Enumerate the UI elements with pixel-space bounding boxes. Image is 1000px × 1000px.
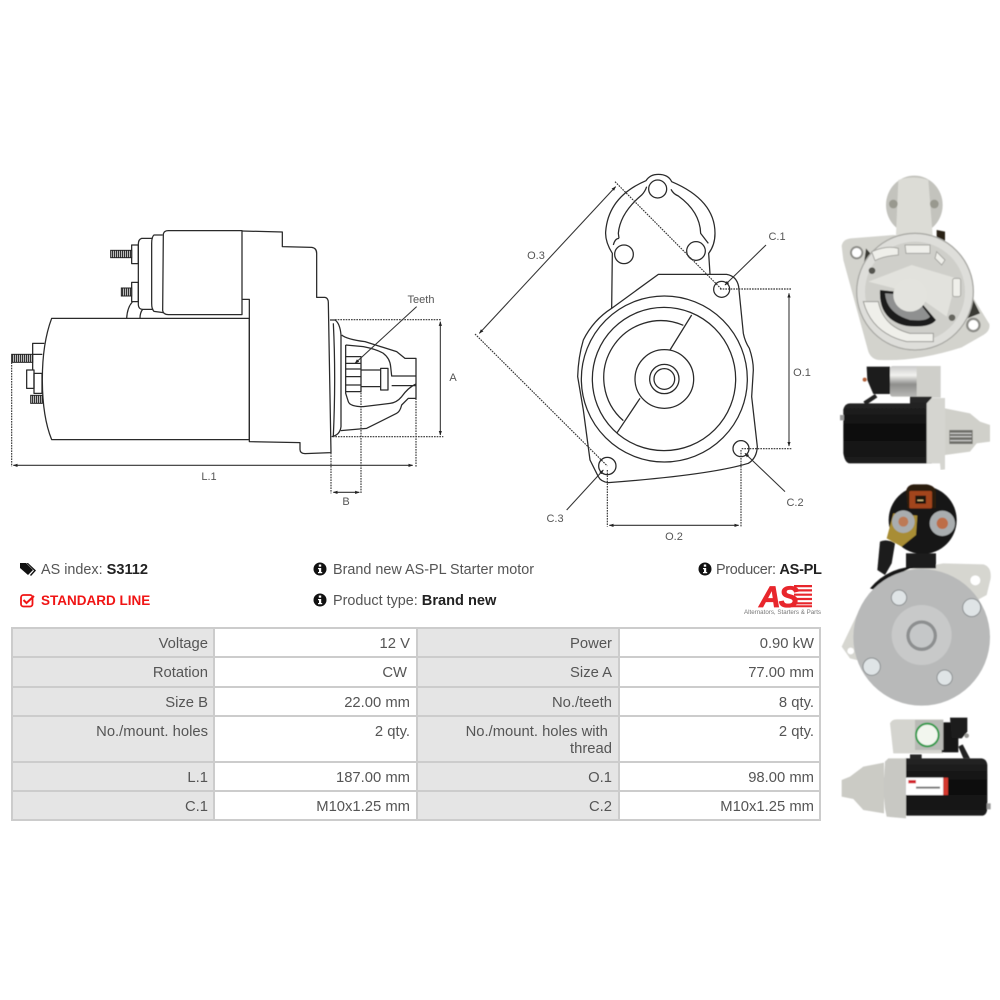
front view technical drawing: C.3 [546,513,564,525]
specification table: Size A [570,665,612,681]
specification table: C.2 [589,799,612,815]
specification table: 98.00 mm [748,770,814,786]
specification table: CW [382,665,407,681]
specification table: 0.90 kW [760,636,814,652]
side view technical drawing: A [449,372,457,384]
specification table: 22.00 mm [344,695,410,711]
specification table: L.1 [187,770,208,786]
front view technical drawing [474,174,811,543]
specification table: Voltage [159,636,208,652]
front view technical drawing: C.1 [768,231,786,243]
icon: check square [20,594,35,608]
side view technical drawing: Teeth [408,294,434,306]
info: brand new starter motor: Brand new AS-PL Starter motor [333,562,534,578]
info: producer: Producer: AS-PL [716,562,822,578]
specification table: O.1 [588,770,612,786]
icon: info [314,562,326,576]
specification table [11,627,821,821]
specification table: M10x1.25 mm [316,799,410,815]
specification table: 187.00 mm [336,770,410,786]
specification table: 2 qty. [779,724,814,740]
logo: AS: Alternators, Starters & Parts [744,609,821,616]
front view technical drawing: O.1 [793,367,811,379]
specification table: No./teeth [552,695,612,711]
photo: starter front end [841,175,990,360]
front view technical drawing: O.2 [665,531,683,543]
side view technical drawing: L.1 [201,471,217,483]
logo: AS [744,584,821,616]
icon: info [698,562,712,576]
specification table: Rotation [153,665,208,681]
side view technical drawing [11,230,457,508]
photo: starter side view right [841,716,992,819]
icon: info [314,594,326,606]
specification table: 2 qty. [375,724,410,740]
side view technical drawing: B [342,496,350,508]
info: product type: Product type: Brand new [333,593,496,609]
info: AS index: AS index: S3112 [41,562,148,578]
photo: starter side view left [840,366,990,470]
specification table: Size B [165,695,208,711]
specification table: C.1 [185,799,208,815]
specification table: thread [570,741,612,757]
specification table: Power [570,636,612,652]
specification table: 77.00 mm [748,665,814,681]
standard line label: STANDARD LINE [41,593,150,608]
front view technical drawing: C.2 [786,497,804,509]
specification table: M10x1.25 mm [720,799,814,815]
specification table: No./mount. holes [96,724,208,740]
icon: tags [20,563,36,576]
specification table: 12 V [380,636,410,652]
photo: starter rear end [842,484,992,706]
specification table: 8 qty. [779,695,814,711]
front view technical drawing: O.3 [527,250,545,262]
specification table: No./mount. holes with [466,724,608,740]
